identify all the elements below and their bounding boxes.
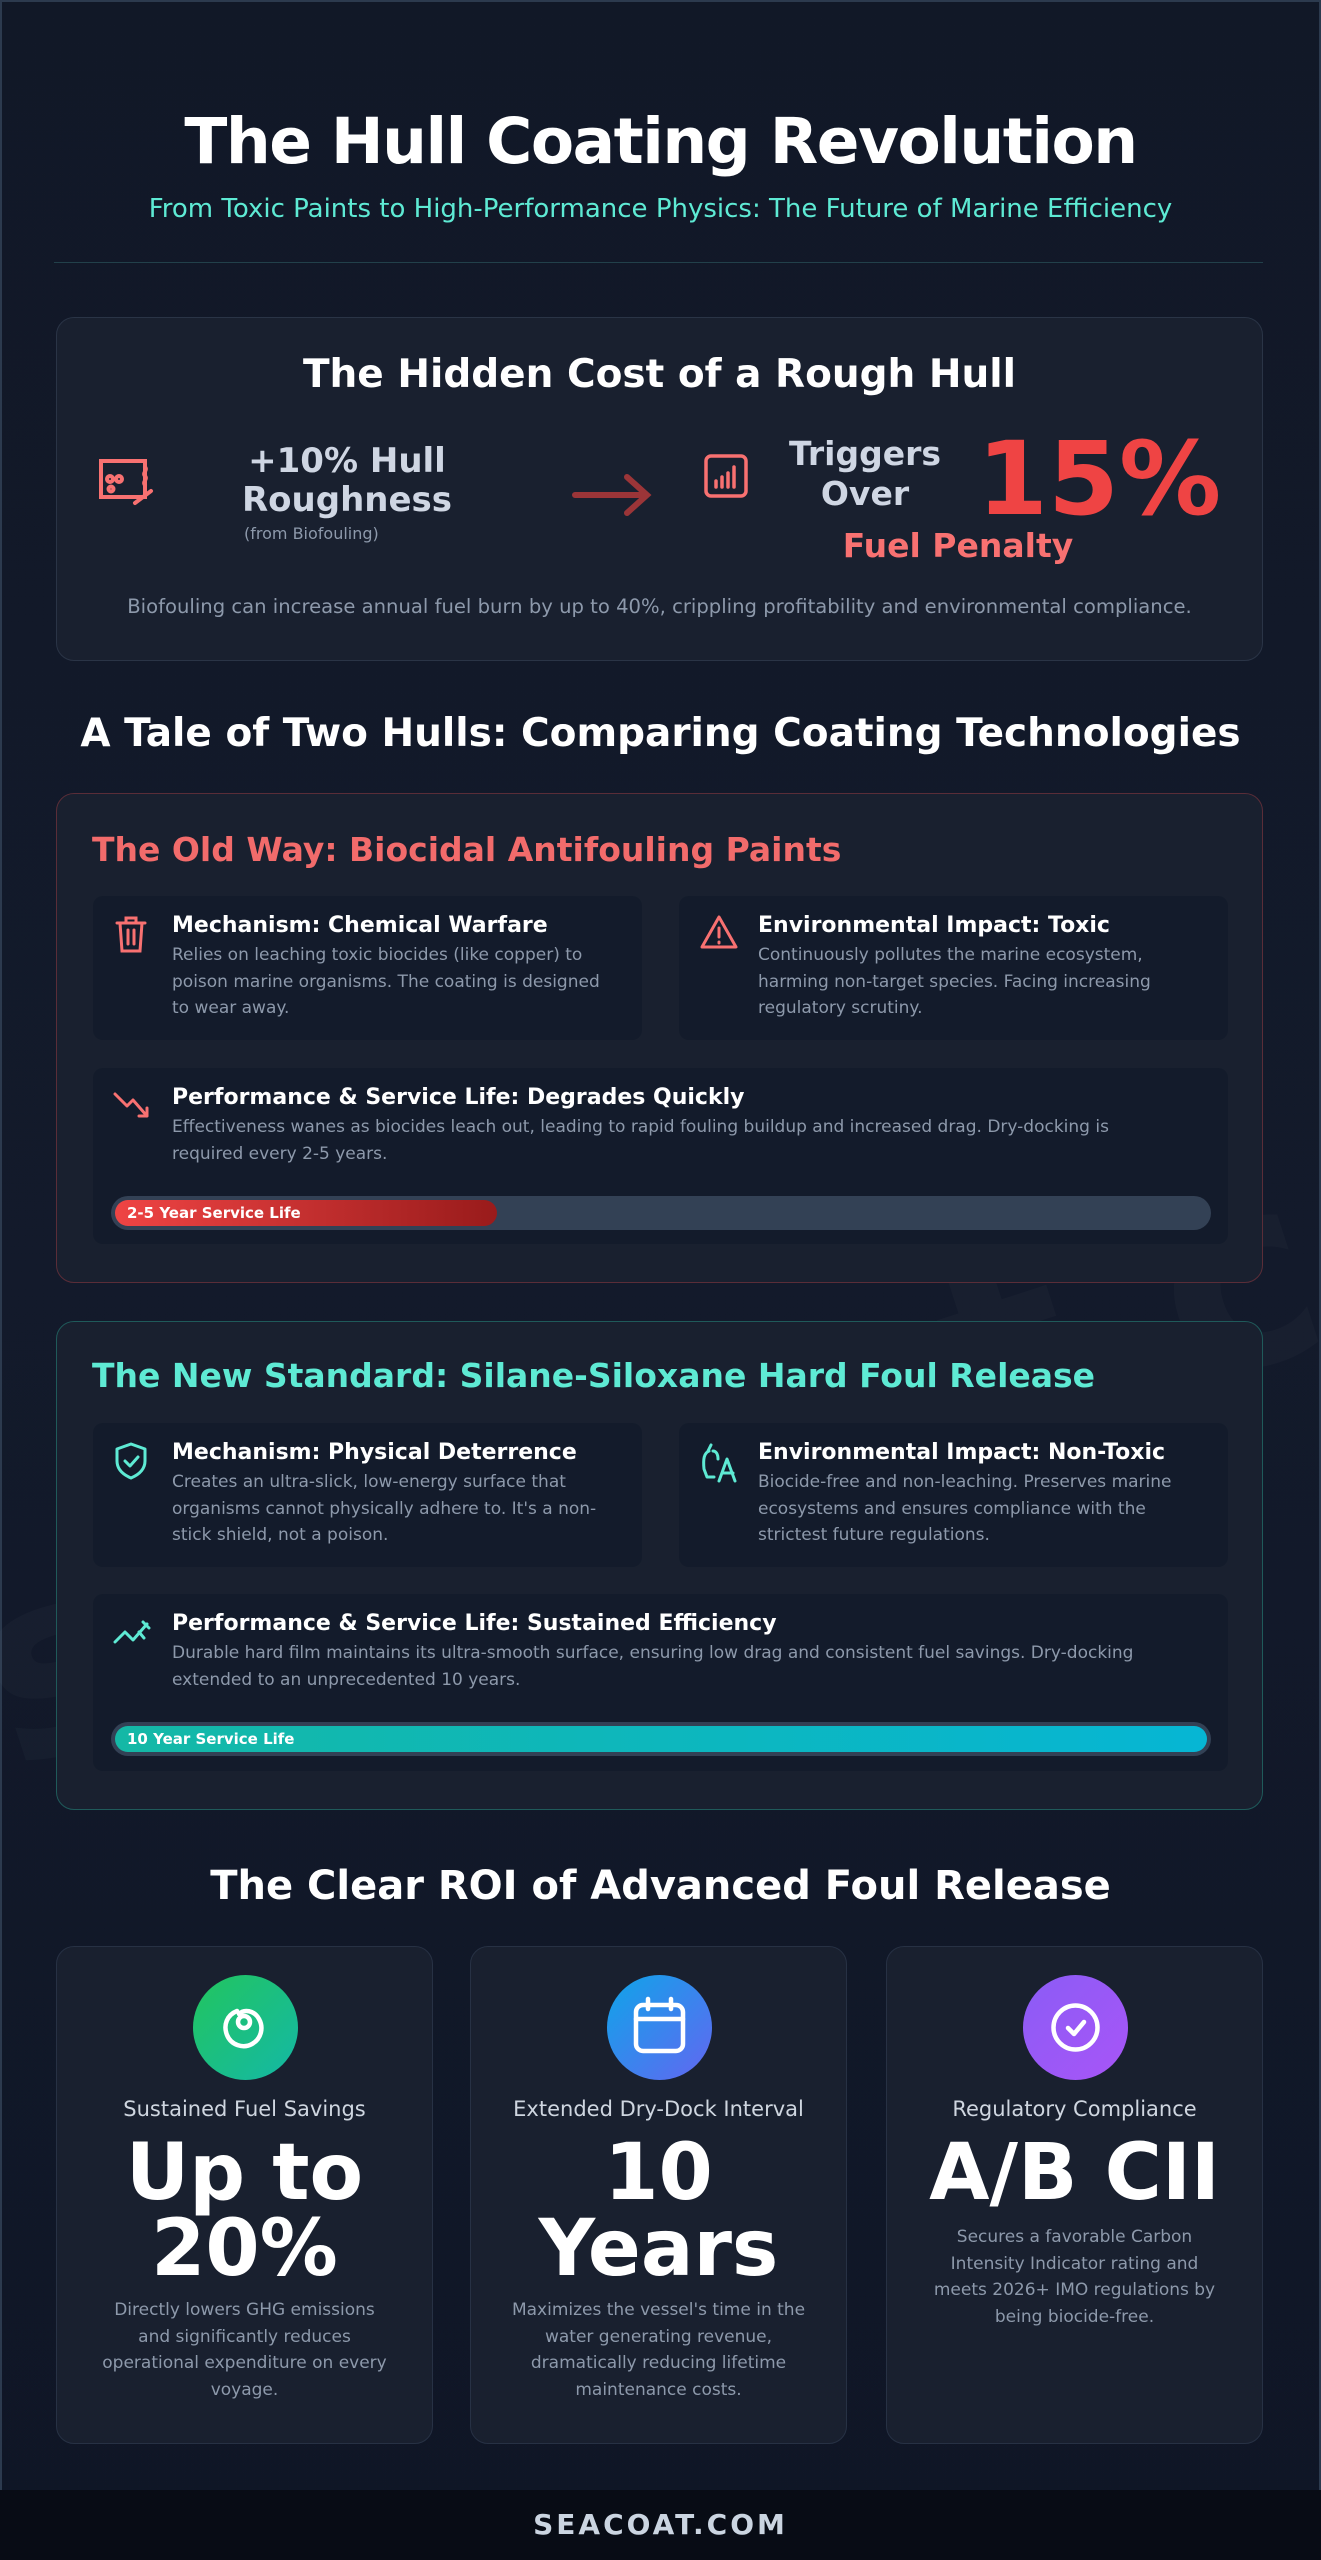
roi card: fuel savings: Directly lowers GHG emissions and significantly reduces operational expenditure on every voyage.	[102, 2300, 387, 2400]
arrow	[572, 474, 652, 516]
stat: triggers over: Triggers	[789, 434, 941, 473]
roi card: compliance: Regulatory Compliance	[952, 2097, 1197, 2121]
card: performance sustained: Performance & Service Life: Sustained Efficiency	[172, 1611, 777, 1636]
card: mechanism chemical	[93, 896, 642, 1040]
roi card: fuel savings: Up to	[126, 2128, 363, 2218]
panel: hidden cost	[56, 317, 1263, 661]
card: mechanism physical	[93, 1423, 642, 1567]
roi card: dry dock	[470, 1946, 847, 2444]
roi card: fuel savings: Sustained Fuel Savings	[123, 2097, 366, 2121]
card: mechanism chemical: Relies on leaching toxic biocides (like copper) to poison marine organisms. The coating is designed to wear away.	[172, 945, 600, 1018]
progress bar: 10 years	[111, 1722, 1211, 1756]
label: fuel penalty: Fuel Penalty	[843, 526, 1073, 565]
panel: old way	[56, 793, 1263, 1283]
progress bar: 2-5 years: 2-5 Year Service Life	[127, 1204, 301, 1222]
icon: check circle	[1023, 1975, 1128, 2080]
card: performance sustained	[93, 1594, 1228, 1771]
card: mechanism chemical: Mechanism: Chemical Warfare	[172, 913, 548, 938]
roi card: compliance	[886, 1946, 1263, 2444]
card: mechanism physical: Mechanism: Physical Deterrence	[172, 1440, 577, 1465]
icon: trend up	[113, 1620, 150, 1644]
roi card: compliance: A/B CII	[929, 2128, 1220, 2218]
note: from biofouling: (from Biofouling)	[244, 524, 379, 543]
title: The Hull Coating Revolution	[184, 105, 1137, 178]
stat: hull roughness	[242, 441, 452, 520]
icon: warning	[700, 915, 738, 948]
icon: trend down	[113, 1092, 149, 1118]
card: performance sustained: Durable hard film maintains its ultra-smooth surface, ensuring low drag and consistent fuel savings. Dry-docking extended to an unprecedented 10 years.	[172, 1643, 1133, 1690]
card: environmental toxic: Continuously pollutes the marine ecosystem, harming non-target species. Facing increasing regulatory scrutiny.	[758, 945, 1151, 1018]
section heading: ROI: The Clear ROI of Advanced Foul Release	[210, 1863, 1111, 1909]
roi card: dry dock: Maximizes the vessel's time in the water generating revenue, dramatically reducing lifetime maintenance costs.	[512, 2300, 805, 2400]
icon: calendar	[607, 1975, 712, 2080]
heading: old way: The Old Way: Biocidal Antifouling Paints	[92, 830, 841, 869]
caption: Biofouling can increase annual fuel burn by up to 40%, crippling profitability and environmental compliance.	[127, 595, 1192, 618]
card: performance degrades	[93, 1068, 1228, 1244]
stat: hull roughness: +10% Hull	[248, 441, 446, 481]
heading: hidden cost: The Hidden Cost of a Rough Hull	[303, 352, 1016, 397]
icon: eco	[702, 1443, 736, 1482]
card: performance degrades: Performance & Service Life: Degrades Quickly	[172, 1085, 744, 1110]
card: mechanism physical: Creates an ultra-slick, low-energy surface that organisms cannot physically adhere to. It's a non-stick shield, not a poison.	[172, 1472, 596, 1545]
icon: fuel savings	[193, 1975, 298, 2080]
icon: shield	[116, 1442, 146, 1480]
progress bar: 2-5 years	[111, 1196, 1211, 1230]
icon: trash	[116, 916, 146, 952]
roi card: dry dock: Years	[539, 2204, 778, 2294]
stat: hull roughness: Roughness	[242, 480, 452, 520]
section heading: two hulls: A Tale of Two Hulls: Comparing Coating Technologies	[80, 711, 1241, 756]
card: performance degrades: Effectiveness wanes as biocides leach out, leading to rapid fouling buildup and increased drag. Dry-docking is required every 2-5 years.	[172, 1117, 1109, 1164]
stat: 15%: 15%	[977, 420, 1221, 539]
subtitle: From Toxic Paints to High-Performance Physics: The Future of Marine Efficiency	[149, 194, 1172, 224]
icon: rough hull	[99, 459, 154, 506]
panel: new standard	[56, 1321, 1263, 1810]
card: environmental non-toxic: Environmental Impact: Non-Toxic	[758, 1440, 1165, 1465]
roi card: dry dock: Extended Dry-Dock Interval	[513, 2097, 804, 2121]
roi card: fuel savings	[56, 1946, 433, 2444]
roi card: fuel savings: 20%	[151, 2204, 338, 2294]
icon: bar chart	[704, 454, 748, 498]
card: environmental non-toxic	[679, 1423, 1228, 1567]
card: environmental non-toxic: Biocide-free and non-leaching. Preserves marine ecosystems and ensures compliance with the strictest future regulations.	[758, 1472, 1172, 1545]
roi card: compliance: Secures a favorable Carbon Intensity Indicator rating and meets 2026+ IMO regulations by being biocide-free.	[934, 2227, 1215, 2326]
footer: SEACOAT.COM	[533, 2508, 788, 2541]
roi card: dry dock: 10	[604, 2128, 713, 2218]
footer	[0, 2490, 1321, 2560]
stat: triggers over: Over	[821, 474, 909, 513]
card: environmental toxic	[679, 896, 1228, 1040]
heading: new standard: The New Standard: Silane-Siloxane Hard Foul Release	[92, 1356, 1095, 1395]
progress bar: 10 years: 10 Year Service Life	[127, 1730, 294, 1748]
stat: triggers over	[789, 434, 941, 513]
card: environmental toxic: Environmental Impact: Toxic	[758, 913, 1110, 938]
